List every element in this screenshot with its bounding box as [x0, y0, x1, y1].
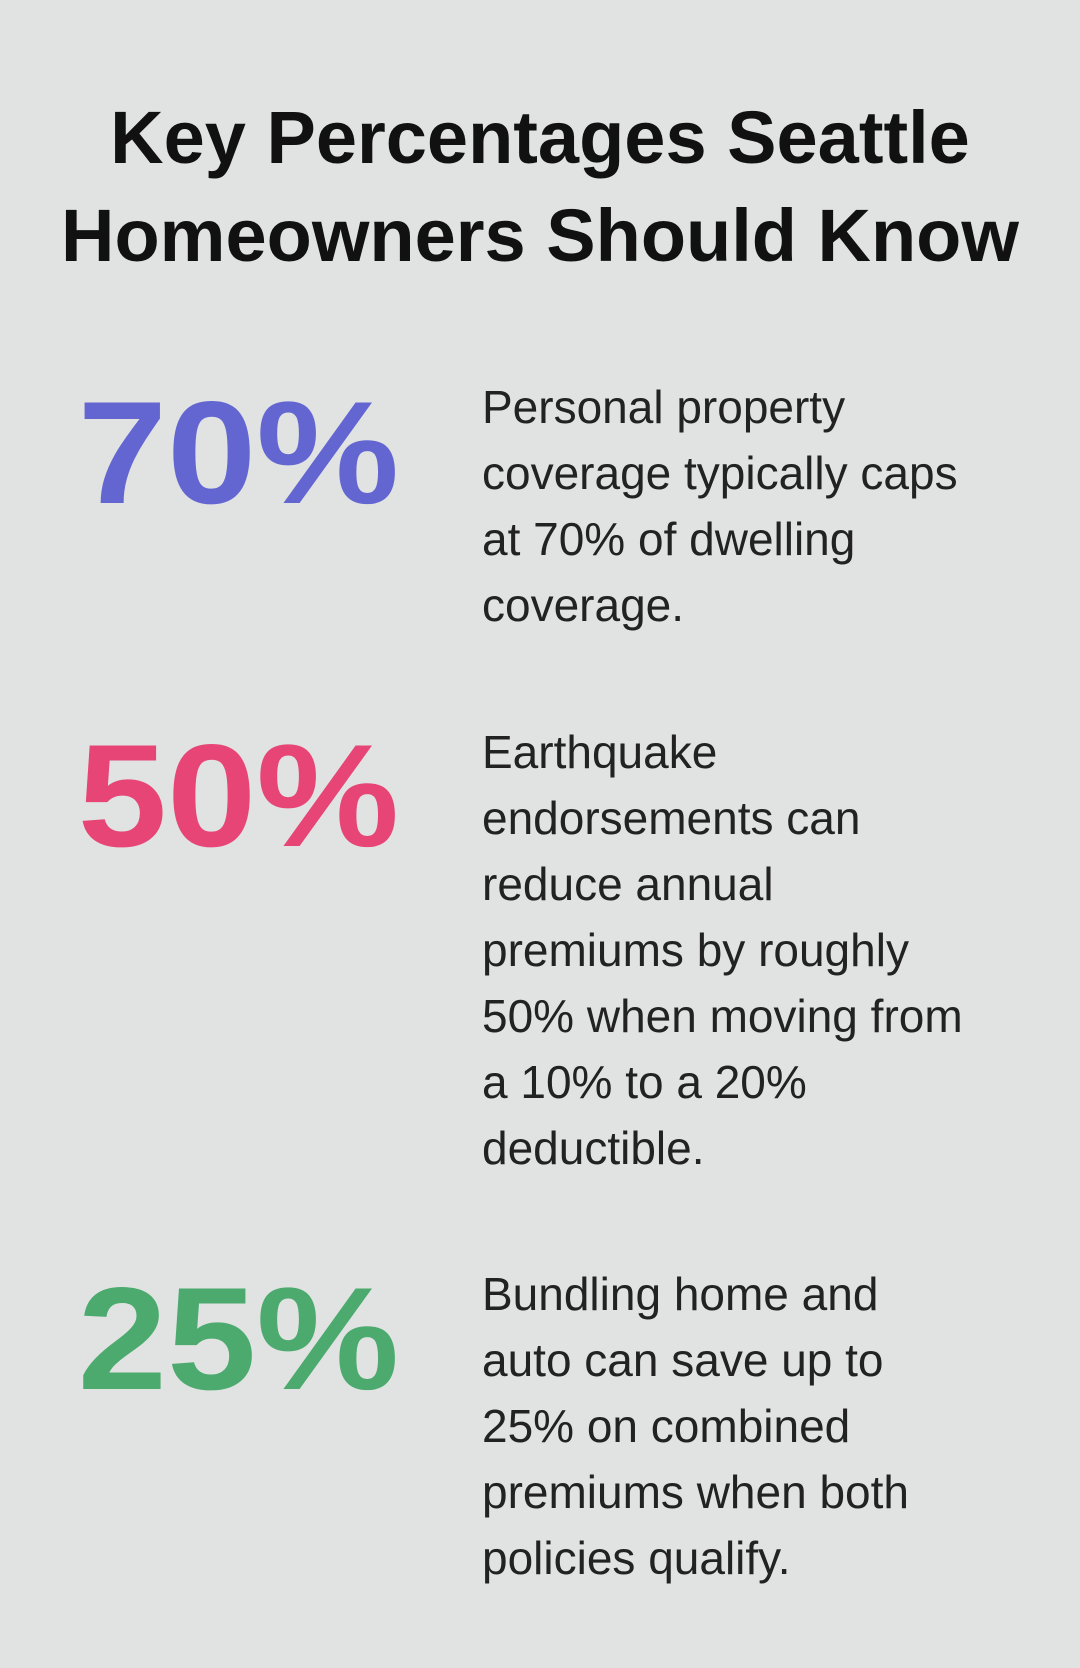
stat 3 description: Bundling home and [482, 1268, 878, 1320]
stat 2 description: a 10% to a 20% [482, 1056, 807, 1108]
title [61, 96, 1020, 277]
title: Key Percentages Seattle [110, 96, 970, 179]
stat 3 description: premiums when both [482, 1466, 909, 1518]
stat 1 number: 70% [78, 371, 399, 534]
stat 2 description: 50% when moving from [482, 990, 963, 1042]
stat 2 description: Earthquake [482, 726, 717, 778]
stat 2 description: endorsements can [482, 792, 860, 844]
stat 2 description: deductible. [482, 1122, 704, 1174]
stat 1 description: at 70% of dwelling [482, 513, 855, 565]
stat 2 description: premiums by roughly [482, 924, 909, 976]
stat 3 description: policies qualify. [482, 1532, 791, 1584]
stat 3 description: 25% on combined [482, 1400, 850, 1452]
stat 1 description [482, 381, 958, 631]
stat 1 description: coverage typically caps [482, 447, 958, 499]
stat 1 description: Personal property [482, 381, 845, 433]
title: Homeowners Should Know [61, 194, 1019, 277]
stat 2 number: 50% [78, 714, 399, 877]
stat 2 description: reduce annual [482, 858, 774, 910]
stat 3 description: auto can save up to [482, 1334, 884, 1386]
stat 2 description [482, 726, 963, 1174]
stat 1 description: coverage. [482, 579, 684, 631]
stat 3 description [482, 1268, 909, 1584]
stat 3 number: 25% [78, 1257, 399, 1420]
